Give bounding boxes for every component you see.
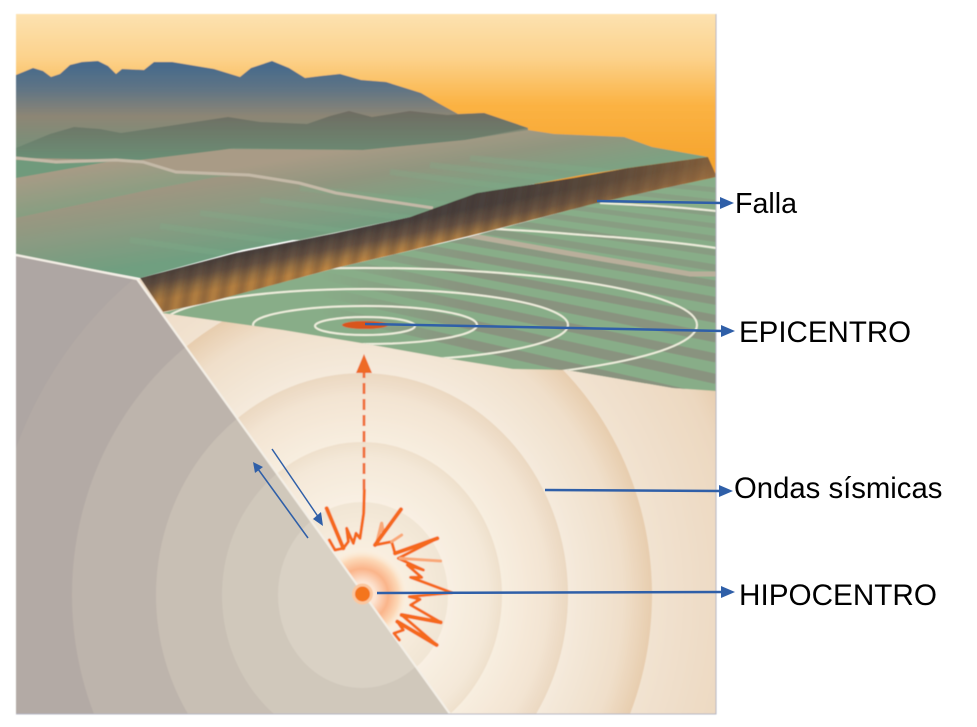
fault scarp (140, 156, 716, 312)
near mountains (16, 111, 528, 165)
middle field layer (16, 161, 249, 218)
near field layer (16, 175, 433, 278)
label: Falla: Falla (735, 188, 797, 220)
arrow: fault slip down (272, 449, 323, 526)
earth cross-section with seismic wave fronts (138, 278, 716, 714)
label: Hipocentro: HIPOCENTRO (739, 579, 937, 612)
illustration: earthquake cross-section (16, 14, 720, 714)
left rock block (16, 256, 448, 714)
far mountains (16, 61, 528, 170)
far field layer (16, 130, 708, 240)
epicentre mark (342, 321, 388, 329)
plateau field stripes (130, 158, 610, 260)
plateau behind the fault (16, 130, 708, 278)
seismic burst (327, 490, 452, 645)
dashed arrow: hypocentre to epicentre (356, 354, 372, 490)
left green strip (16, 160, 116, 180)
callout arrow: Falla (597, 197, 734, 209)
label: Ondas sísmicas: Ondas sísmicas (734, 472, 942, 505)
hypocentre dot (352, 584, 373, 604)
surface with epicentre rings (162, 176, 716, 392)
field stripes (368, 184, 716, 389)
arrow: fault slip up (253, 462, 308, 538)
callout arrow: Ondas sísmicas (545, 485, 733, 497)
sky (16, 14, 716, 184)
fault plane edges (16, 255, 450, 714)
road (16, 158, 433, 208)
seismic rings on the surface (170, 202, 716, 371)
image right and bottom edge (16, 14, 716, 714)
callout arrow: Hipocentro (377, 586, 735, 598)
callout arrow: Epicentro (365, 324, 735, 337)
label: Epicentro: EPICENTRO (739, 316, 911, 349)
field road (467, 235, 716, 274)
hypocentre glow (341, 553, 404, 626)
